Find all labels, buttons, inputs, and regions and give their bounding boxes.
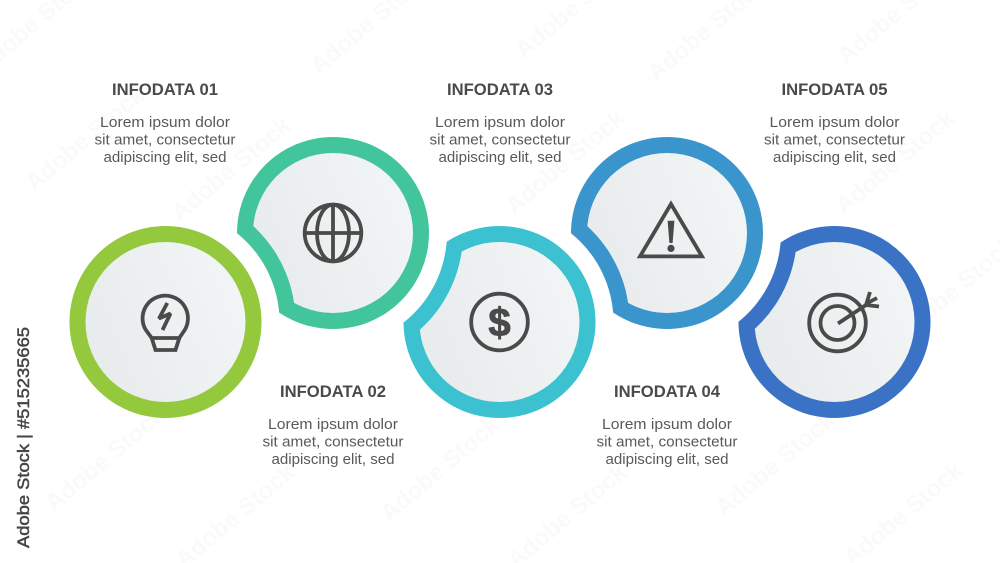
circle 5: dark blue with target (738, 226, 930, 418)
text block: infodata 03: INFODATA 03 (447, 81, 553, 99)
text block: infodata 02 (262, 383, 404, 468)
text block: infodata 03: Lorem ipsum dolor (435, 114, 565, 131)
text block: infodata 05 (764, 81, 905, 166)
circle 3: cyan with dollar (404, 226, 596, 418)
circle 1: green with lightbulb (70, 226, 262, 418)
icon: target with arrow (809, 292, 879, 351)
icon: lightbulb (143, 296, 188, 350)
text block: infodata 02: INFODATA 02 (280, 383, 386, 401)
watermark pattern: Adobe Stock (166, 111, 297, 227)
watermark pattern: Adobe Stock (20, 81, 151, 197)
text block: infodata 05: INFODATA 05 (782, 81, 888, 99)
text block: infodata 05: sit amet, consectetur (764, 132, 905, 148)
text block: infodata 05: Lorem ipsum dolor (770, 114, 900, 131)
text block: infodata 04: sit amet, consectetur (596, 434, 738, 450)
icon: globe (304, 204, 362, 262)
circle 4: blue with warning triangle (571, 137, 763, 329)
text block: infodata 05: adipiscing elit, sed (773, 149, 896, 166)
text block: infodata 02: adipiscing elit, sed (272, 451, 394, 468)
text block: infodata 01: adipiscing elit, sed (104, 149, 226, 166)
text block: infodata 04: Lorem ipsum dolor (602, 416, 732, 433)
text block: infodata 03 (430, 81, 570, 166)
side stock id label: Adobe Stock | #515235665 (14, 327, 33, 548)
watermark pattern: Adobe Stock (40, 401, 171, 517)
text block: infodata 01 (94, 81, 236, 166)
text block: infodata 02: Lorem ipsum dolor (268, 416, 398, 433)
text block: infodata 01: INFODATA 01 (112, 81, 218, 99)
watermark pattern: Adobe Stock (500, 104, 631, 220)
text block: infodata 03: adipiscing elit, sed (438, 149, 562, 166)
text block: infodata 04: adipiscing elit, sed (606, 451, 728, 468)
text block: infodata 04 (596, 383, 738, 468)
text block: infodata 04: INFODATA 04 (614, 383, 721, 401)
icon: dollar coin: $ (488, 301, 511, 345)
watermark pattern: Adobe Stock (830, 104, 961, 220)
text block: infodata 03: sit amet, consectetur (430, 132, 570, 148)
text block: infodata 02: sit amet, consectetur (262, 434, 404, 450)
icon: warning triangle (640, 204, 702, 256)
text block: infodata 01: Lorem ipsum dolor (100, 114, 230, 131)
circle 2: teal green with globe (237, 137, 429, 329)
text block: infodata 01: sit amet, consectetur (94, 132, 236, 148)
icon: dollar coin (471, 294, 528, 350)
watermark pattern: Adobe Stock (710, 406, 841, 522)
watermark pattern: Adobe Stock (375, 411, 506, 527)
